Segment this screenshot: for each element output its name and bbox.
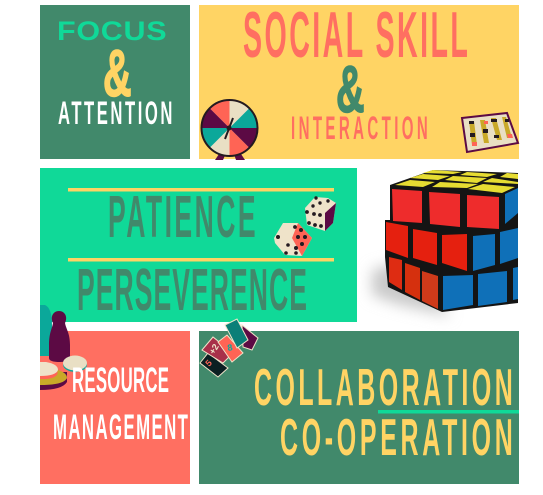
ampersand: focus: & [103,37,132,111]
panel: patience and perseverence [40,168,357,323]
heading: interaction: INTERACTION [291,111,428,147]
divider: top [68,188,334,192]
icon: playing cards [200,319,258,377]
icon: playing cards: 5 [203,358,214,368]
heading: perseverence: PERSEVERENCE [77,257,307,323]
heading: management: MANAGEMENT [53,407,188,447]
heading: social skill: SOCIAL SKILL [243,0,468,71]
heading: attention: ATTENTION [58,96,172,132]
icon: playing cards: +2 [207,342,221,356]
heading: patience: PATIENCE [108,184,256,250]
heading: resource: RESOURCE [72,360,169,400]
divider: collaboration [378,410,519,414]
ampersand: social skill: & [336,53,365,127]
panel: resource management [40,305,190,484]
icon: prize wheel [202,100,258,160]
heading: collaboration: COLLABORATION [254,358,513,416]
icon: dice [274,196,336,256]
heading: focus: FOCUS [57,17,167,47]
panel: focus and attention [40,5,190,159]
divider: middle [68,258,334,262]
panel: collaboration and co-operation [199,319,519,484]
panel: social skill and interaction [199,0,519,160]
icon: game pieces [40,305,87,390]
photo: rubik's cube [372,170,518,316]
icon: board game [462,113,518,152]
icon: playing cards: 8 [227,342,233,353]
heading: co-operation: CO-OPERATION [280,408,513,466]
